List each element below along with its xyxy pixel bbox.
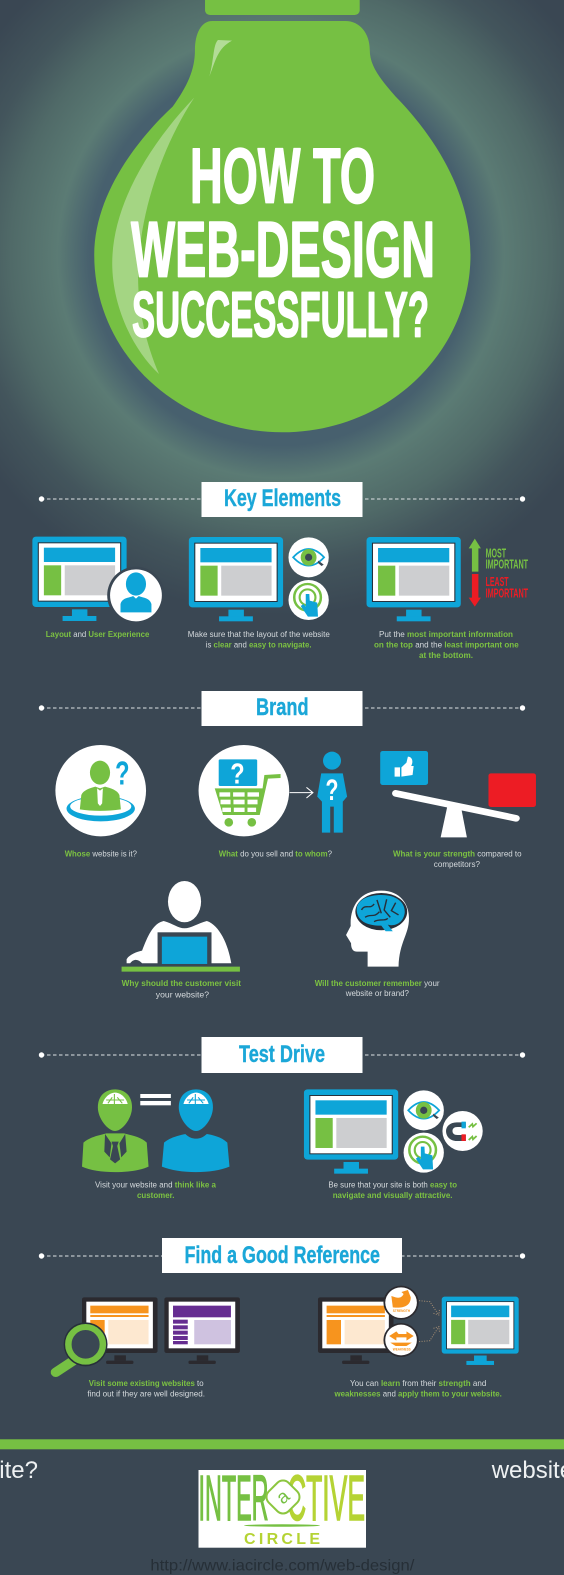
bulb small highlight <box>209 40 232 77</box>
icon: head with brain <box>346 891 409 967</box>
text: importance caption: Put the most important information <box>379 629 513 639</box>
text: easy to navigate: navigate and visually attractive. <box>333 1190 452 1200</box>
panel: test drive icons <box>82 1089 483 1174</box>
panel: reference icons <box>56 1286 519 1372</box>
icon: own site monitor <box>442 1297 519 1365</box>
text: strength: What is your strength compared to <box>393 849 522 859</box>
section header: Find a Good Reference: Find a Good Reference <box>184 1242 380 1269</box>
source url: http://www.iacircle.com/web-design/ <box>150 1558 415 1575</box>
footer bar <box>0 1439 564 1449</box>
section header: Find a Good Reference <box>39 1238 525 1273</box>
icon: seesaw strength <box>380 751 536 837</box>
section header: Key Elements: Key Elements <box>224 485 341 512</box>
text: layout caption: Layout and User Experience <box>46 629 149 639</box>
title <box>131 132 435 350</box>
text: importance caption: on the top and the least important one <box>374 640 519 650</box>
section header: Test Drive <box>39 1037 525 1073</box>
icon: orange site monitor <box>82 1297 158 1364</box>
text: learn strengths <box>334 1378 502 1398</box>
icon: blue customer <box>162 1089 229 1172</box>
icon: purple site monitor <box>164 1297 240 1364</box>
text: remember: Will the customer remember your <box>315 978 440 988</box>
text: easy to navigate <box>328 1180 457 1200</box>
icon: whose website person <box>55 745 146 836</box>
section header: Brand: Brand <box>256 694 309 721</box>
bulb cap <box>205 0 360 15</box>
text: remember: website or brand? <box>345 988 409 998</box>
section header: Key Elements <box>39 482 525 517</box>
panel: key elements icons <box>32 537 481 624</box>
importance labels: MOST <box>486 546 506 560</box>
text: clarity caption: is clear and easy to navigate. <box>206 640 312 650</box>
arrow: cart to customer <box>290 787 313 798</box>
text: why visit: your website? <box>156 990 209 1000</box>
text: learn strengths: You can learn from their strength and <box>350 1378 486 1388</box>
bulb highlight <box>112 98 194 374</box>
icon: monitor with importance arrows <box>367 537 481 621</box>
text: whose website: Whose website is it? <box>65 849 137 859</box>
importance labels <box>486 546 528 600</box>
section header: Test Drive: Test Drive <box>239 1041 325 1068</box>
section header: Brand <box>39 691 525 726</box>
panel: brand icons <box>55 745 536 972</box>
logo: Interactive Circle: INTER <box>198 1462 268 1534</box>
icon: equals sign <box>140 1094 171 1105</box>
icon: green business person <box>82 1089 149 1172</box>
text: why visit <box>122 978 241 1000</box>
arrow: weakness to own site <box>419 1327 440 1342</box>
icon: shopping cart: ? <box>230 758 245 790</box>
text: clarity caption: Make sure that the layout of the website <box>188 629 330 639</box>
text: think like a customer: Visit your website and think like a <box>95 1180 216 1190</box>
text: think like a customer: customer. <box>137 1190 174 1200</box>
title: HOW TO <box>190 132 375 220</box>
text: what do you sell: What do you sell and to whom? <box>219 849 332 859</box>
icon: whose website person: ? <box>115 756 129 792</box>
text: importance caption <box>374 629 519 660</box>
icon: competitor monitor with strength and weakness: WEAKNESS <box>393 1347 411 1352</box>
logo: Interactive Circle: CIRCLE <box>244 1531 320 1548</box>
light bulb <box>94 0 470 432</box>
icon: monitor with user <box>32 537 165 624</box>
text: CTIVE <box>287 1462 365 1534</box>
icon: monitor with eye and tap <box>189 537 329 621</box>
icon: monitor with eye, tap and magnet <box>304 1089 483 1174</box>
text: visit existing websites: find out if they are well designed. <box>87 1388 205 1398</box>
importance labels: IMPORTANT <box>486 557 528 571</box>
footer clipped text left: ite? <box>0 1457 38 1484</box>
icon: competitor monitor with strength and weakness <box>318 1286 419 1364</box>
text: easy to navigate: Be sure that your site is both easy to <box>328 1180 457 1190</box>
text: remember <box>315 978 440 998</box>
text: importance caption: at the bottom. <box>419 650 473 660</box>
importance labels: IMPORTANT <box>486 586 528 600</box>
icon: customer with question: ? <box>326 774 338 807</box>
background glow <box>0 0 564 700</box>
text: think like a customer <box>95 1180 216 1200</box>
text: clarity caption <box>188 629 330 650</box>
icon: competitor monitor with strength and weakness: STRENGTH <box>393 1308 410 1313</box>
text: why visit: Why should the customer visit <box>122 978 241 988</box>
text: strength <box>393 849 522 869</box>
text: learn strengths: weaknesses and apply them to your website. <box>334 1388 502 1398</box>
text: visit existing websites: Visit some existing websites to <box>89 1378 204 1388</box>
text: visit existing websites <box>87 1378 205 1398</box>
icon: customer with question <box>317 752 347 833</box>
icon: shopping cart <box>199 745 289 836</box>
importance labels: LEAST <box>486 575 509 589</box>
icon: magnifying glass <box>56 1322 108 1372</box>
logo: Interactive Circle: a <box>273 1486 294 1509</box>
bulb body <box>94 21 470 432</box>
text: strength: competitors? <box>434 859 480 869</box>
arrow: strength to own site <box>419 1301 440 1315</box>
icon: person with laptop <box>122 881 240 972</box>
